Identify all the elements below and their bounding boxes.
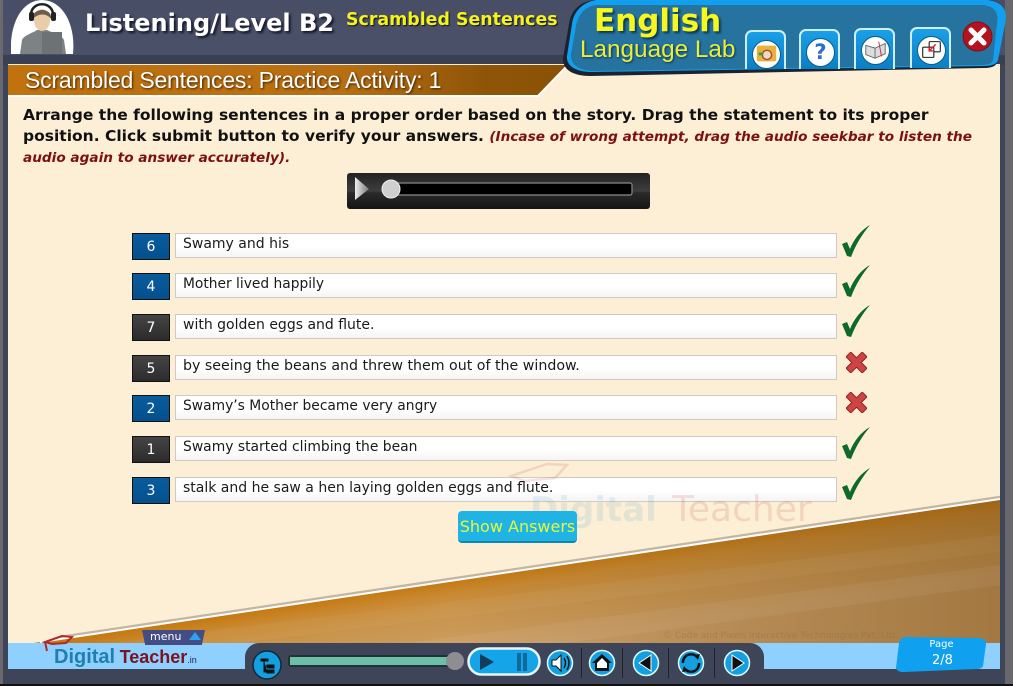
- instructions text: Arrange the following sentences in a proper order based on the story. Drag the statement to its proper: [23, 106, 928, 124]
- number badge: 3: [147, 483, 155, 499]
- icon button: help: ?: [814, 40, 827, 64]
- sentence box: [175, 273, 837, 298]
- icon button: book: [854, 28, 895, 69]
- answer row 6: [132, 427, 870, 463]
- sentence box: stalk and he saw a hen laying golden eggs and flute.: [183, 480, 553, 496]
- icon: green check: [842, 305, 870, 337]
- English Language Lab header panel: [563, 0, 1006, 76]
- answer row 7: [132, 468, 870, 504]
- watermark: Digital Teacher: Teacher: [672, 489, 812, 530]
- number badge: [132, 273, 170, 300]
- answer row 4: [132, 352, 867, 382]
- number badge: [132, 314, 170, 341]
- icon: home: [588, 650, 616, 676]
- number badge: 6: [147, 239, 155, 255]
- sentence box: Swamy and his: [183, 236, 289, 252]
- sentence box: [175, 395, 837, 420]
- sentence box: [175, 355, 837, 380]
- icon button: help: [799, 29, 840, 69]
- icon: red cross: [846, 352, 867, 373]
- progress bar: [288, 652, 464, 670]
- menu tab: [142, 630, 205, 645]
- activity title text: Scrambled Sentences: Practice Activity: 1: [25, 67, 441, 93]
- sentence box: [175, 314, 837, 339]
- number badge: [132, 477, 170, 504]
- icon: contents tree: [252, 650, 282, 680]
- answer row 1: [132, 225, 870, 260]
- icon: previous: [632, 650, 660, 676]
- Show Answers button: Show Answers: [460, 517, 575, 536]
- sentence box: Mother lived happily: [183, 276, 324, 292]
- number badge: 7: [147, 320, 155, 336]
- icon: close button: [962, 22, 992, 52]
- logo wordmark: Digital Teacher.in: [54, 646, 197, 668]
- heading: Language Lab: Language Lab: [580, 36, 735, 63]
- activity title bar: [8, 65, 566, 97]
- header background band: [0, 0, 1013, 65]
- page label: Page: [929, 639, 954, 650]
- audio player: [347, 173, 650, 209]
- icon: next: [724, 650, 750, 676]
- sentence box: [175, 233, 837, 258]
- sentence box: [175, 436, 837, 461]
- number badge: [132, 395, 170, 422]
- watermark: Digital Teacher: Digital: [530, 490, 657, 530]
- number badge: [132, 355, 170, 382]
- icon: volume: [546, 650, 574, 676]
- icon: green check: [842, 468, 870, 500]
- page number: 2/8: [932, 653, 953, 668]
- number badge: [132, 233, 170, 260]
- sentence box: Swamy started climbing the bean: [183, 439, 417, 455]
- Show Answers button: [458, 511, 577, 543]
- icon button: resize window: [910, 27, 951, 68]
- icon: graduation cap: [42, 635, 74, 652]
- sentence box: by seeing the beans and threw them out of the window.: [183, 358, 580, 374]
- number badge: 5: [147, 361, 155, 377]
- bottom control bar: [245, 643, 764, 684]
- icon: green check: [842, 265, 870, 297]
- heading: Listening / Level B2: Listening/Level B2: [85, 9, 334, 37]
- number badge: 4: [147, 279, 155, 295]
- icon: listener with headphones: [11, 0, 74, 54]
- instructions text: audio again to answer accurately).: [23, 150, 290, 166]
- answer row 3: [132, 305, 870, 341]
- number badge: [132, 436, 170, 463]
- Digital Teacher logo: [42, 635, 197, 668]
- icon button: history folder: [745, 30, 786, 69]
- play and pause pill: [467, 647, 541, 676]
- number badge: 1: [147, 442, 155, 458]
- copyright line: © Code and Pixels Interactive Technologies Pvt. Ltd.: [663, 631, 898, 641]
- heading: English: English: [594, 3, 721, 39]
- icon: green check: [842, 225, 870, 257]
- answer row 5: [132, 392, 867, 422]
- watermark: Digital Teacher: [508, 462, 812, 530]
- icon: replay: [678, 650, 704, 676]
- instructions text: position. Click submit button to verify your answers. (Incase of wrong attempt, drag the audio seekbar to listen the: [23, 127, 972, 145]
- icon: red cross: [846, 392, 867, 413]
- number badge: 2: [147, 401, 155, 417]
- menu tab: menu: [150, 630, 181, 643]
- heading: Scrambled Sentences: Scrambled Sentences: [346, 10, 558, 30]
- sentence box: [175, 477, 837, 502]
- instructions text: [23, 106, 972, 166]
- page indicator: [896, 637, 986, 672]
- sentence box: Swamy’s Mother became very angry: [183, 398, 437, 414]
- sentence box: with golden eggs and flute.: [183, 317, 374, 333]
- answer row 2: [132, 265, 870, 300]
- icon: green check: [842, 427, 870, 459]
